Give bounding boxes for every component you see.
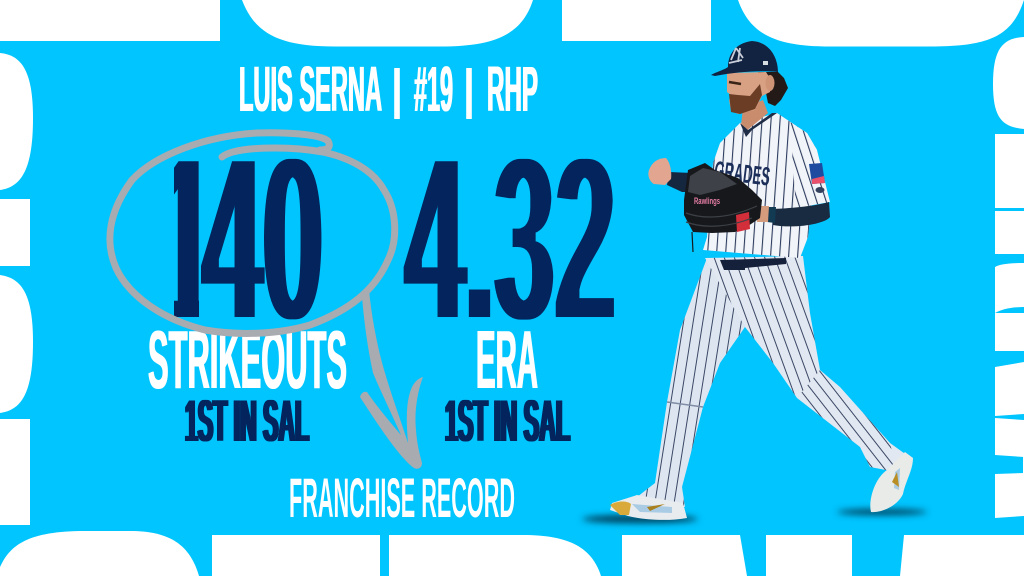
hand-drawn arrow to franchise record: [360, 290, 423, 469]
shadow under back foot: [837, 509, 927, 515]
sleeve patch: [809, 163, 825, 193]
belt: [720, 258, 786, 270]
glove: Rawlings: [694, 196, 720, 206]
neck: [741, 100, 768, 132]
jersey sleeve: [790, 122, 830, 208]
headline: player name, number, position: |: [464, 59, 474, 120]
infographic canvas: FRANCHISE RECORD: [289, 466, 515, 529]
shadow under front foot: [582, 515, 698, 523]
stat: 4.32 ERA: 4.32: [405, 107, 615, 372]
glove: [684, 163, 762, 252]
back cleat: [870, 452, 913, 512]
right forearm sleeve: [773, 202, 830, 226]
hair: [758, 72, 788, 106]
stat: 140 strikeouts: [148, 158, 346, 442]
headline: player name, number, position: |: [392, 59, 402, 120]
jersey wordmark: GRADES: [713, 155, 772, 192]
brow and eye: [729, 82, 741, 84]
left leg: [637, 258, 745, 507]
player photo illustration: [582, 41, 927, 523]
stat: 4.32 ERA: ERA: [476, 313, 538, 406]
wristband: [767, 207, 776, 223]
infographic canvas: STRIKEOUTS: [148, 313, 347, 406]
right leg: [705, 256, 908, 472]
hand: [757, 206, 769, 222]
stat: 4.32 ERA: 1ST IN SAL: [445, 388, 570, 454]
front cleat: [610, 495, 687, 520]
infographic canvas: RHP: [487, 53, 538, 125]
headline: player name, number, position: LUIS SERNA: [239, 53, 382, 125]
stat: 140 strikeouts: 140: [156, 107, 323, 372]
collar: [740, 113, 777, 137]
ear: [766, 75, 774, 91]
headline: player name, number, position: #19: [414, 53, 453, 125]
cap: [711, 41, 778, 76]
beard: [729, 84, 762, 114]
fist: [648, 158, 671, 185]
left forearm sleeve: [667, 172, 697, 192]
stat: 140 strikeouts: 1ST IN SAL: [185, 388, 309, 454]
jersey torso: [703, 113, 817, 258]
face: [727, 72, 771, 114]
hand-drawn circle around 140: [110, 133, 395, 333]
